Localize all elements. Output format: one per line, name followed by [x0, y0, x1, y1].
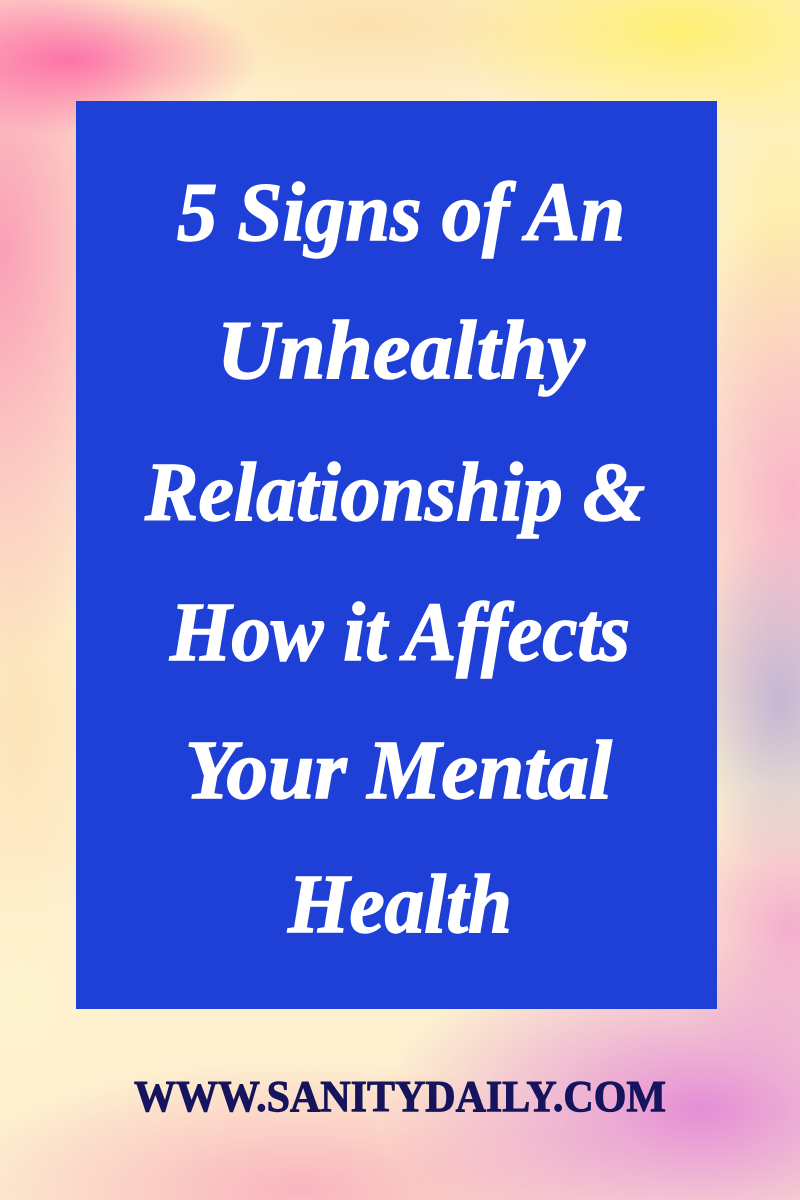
title line 4: How it Affects — [169, 586, 630, 679]
title line 5: Your Mental — [185, 724, 613, 817]
title line 2: Unhealthy — [217, 304, 586, 397]
title line 6: Health — [287, 858, 512, 951]
title line 3: Relationship & — [144, 446, 645, 539]
panel: blue rectangle — [76, 101, 717, 1009]
title — [144, 166, 645, 951]
title line 1: 5 Signs of An — [177, 166, 625, 259]
website url: WWW.SANITYDAILY.COM — [134, 1072, 666, 1121]
